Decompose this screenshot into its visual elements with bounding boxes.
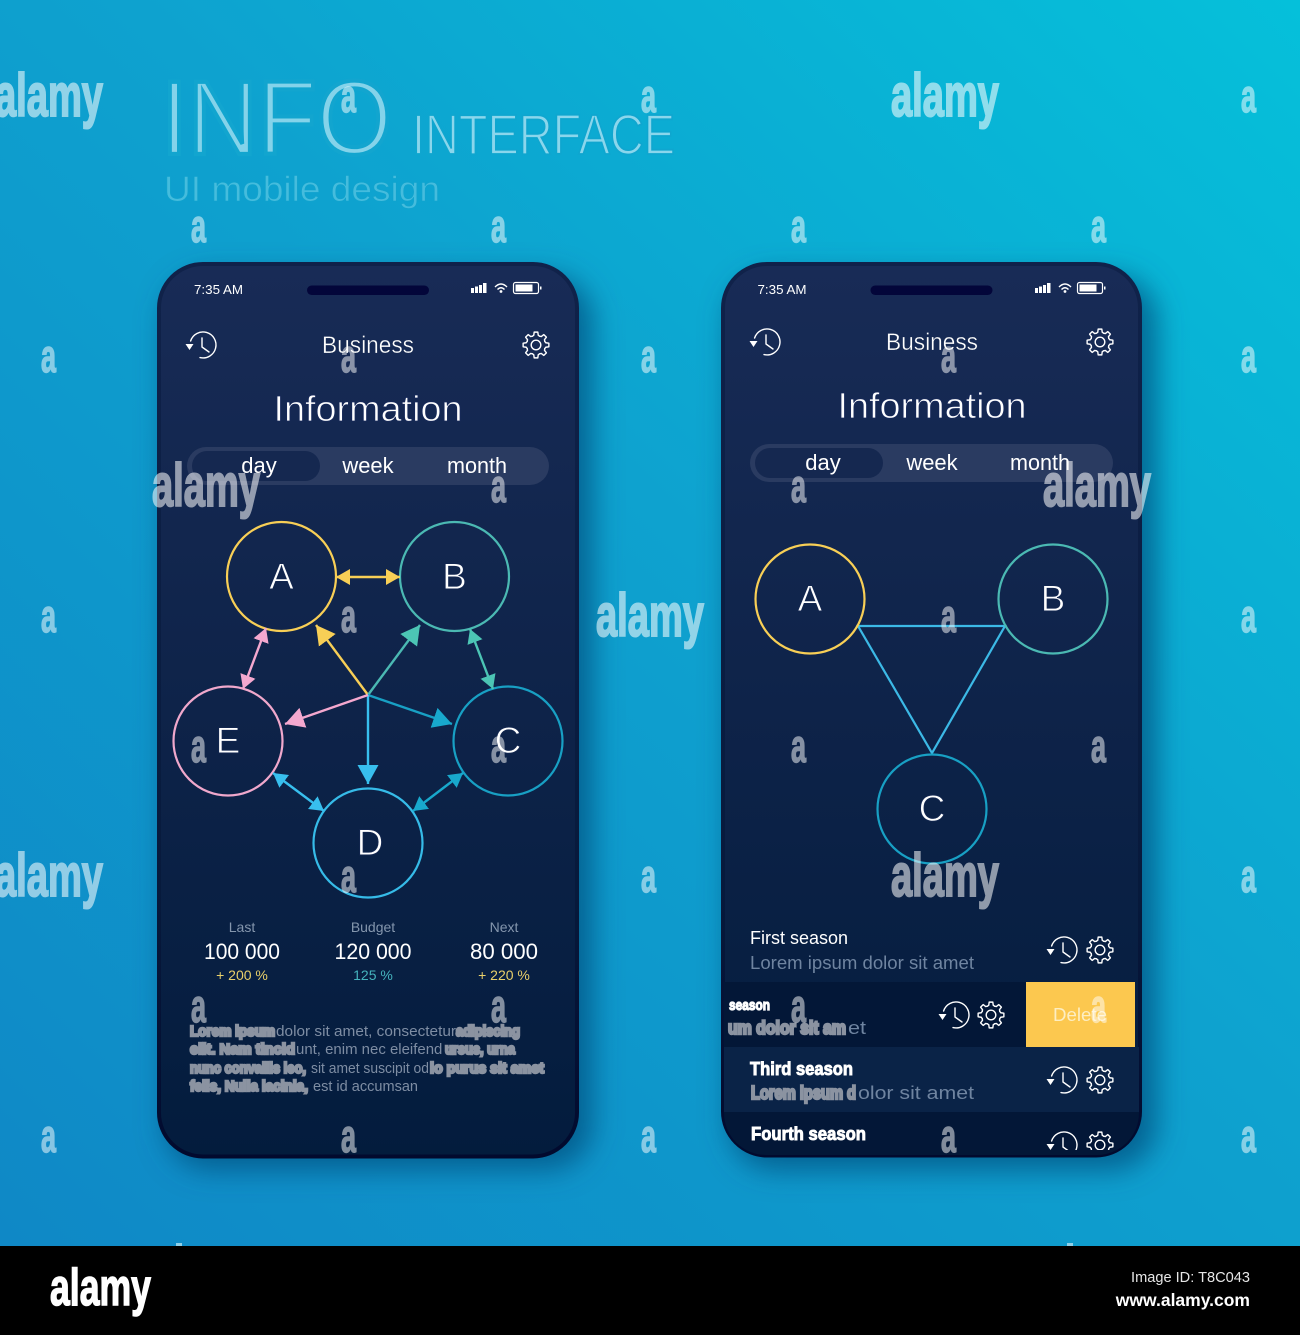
paragraph: felis, Nulla lacinia, [190, 1079, 308, 1095]
row: first season: Lorem ipsum dolor sit amet [750, 953, 974, 973]
tabs [750, 444, 1113, 482]
node A [756, 544, 864, 654]
row: third season background [724, 1047, 1139, 1112]
phone shadows [165, 275, 1157, 1170]
watermark: repeated letter a: a [1241, 590, 1256, 642]
node E [174, 686, 282, 796]
footer band: www.alamy.com [1115, 1290, 1250, 1310]
notch [870, 286, 992, 295]
tabs: month [1010, 450, 1070, 475]
stat: Next: 80 000 [470, 939, 538, 964]
status icons [1035, 282, 1106, 294]
stat: Budget: 120 000 [334, 939, 412, 964]
paragraph: adipiscing [456, 1024, 520, 1040]
node C: C [919, 788, 945, 829]
row: second season swiped: et [848, 1018, 866, 1038]
tabs: day [805, 450, 841, 475]
footer band: Image ID: T8C043 [1131, 1270, 1250, 1286]
watermark: repeated letter a: a [941, 330, 956, 382]
row: second season swiped [728, 1001, 1005, 1036]
paragraph: nunc convallis leo, [190, 1061, 306, 1077]
row: fourth season [752, 1126, 1114, 1150]
node A: A [269, 556, 294, 597]
watermark: alamy wordmarks: alamy [152, 452, 260, 519]
stat: Last: Last [229, 919, 255, 935]
node B: B [1041, 578, 1065, 619]
watermark: repeated letter a: a [491, 980, 506, 1032]
phone body [723, 264, 1140, 1156]
footer band [0, 1243, 1300, 1335]
phone: right [723, 264, 1140, 1158]
watermark: alamy wordmarks: alamy [0, 842, 103, 909]
watermark: repeated letter a: a [1241, 850, 1256, 902]
paragraph: unt, enim nec eleifend c [296, 1042, 454, 1058]
watermark: repeated letter a: a [41, 1110, 56, 1162]
watermark: repeated letter a: a [191, 200, 206, 252]
node B: B [442, 556, 467, 597]
icon: history [186, 332, 216, 358]
watermark: repeated letter a: a [1091, 200, 1106, 252]
watermark: alamy wordmarks: alamy [596, 582, 704, 649]
node C: C [495, 720, 521, 761]
stat: Next [470, 919, 538, 983]
triangle [858, 626, 1005, 753]
node D: D [357, 822, 383, 863]
title: INTERFACE: INTERFACE [412, 103, 675, 167]
watermark: repeated letter a: a [641, 850, 656, 902]
stat: Budget: Budget [351, 919, 395, 935]
paragraph: dolor sit amet, consectetur [276, 1024, 456, 1040]
watermark: repeated letter a: a [191, 980, 206, 1032]
watermark: repeated letter a: a [341, 590, 356, 642]
status icons [471, 282, 542, 294]
watermark: repeated letter a: a [1241, 1110, 1256, 1162]
status time: 7:35 AM [194, 282, 243, 297]
watermark: repeated letter a: a [341, 70, 356, 122]
watermark: repeated letter a: a [941, 590, 956, 642]
row: fourth season background [724, 1112, 1139, 1157]
watermark: repeated letter a: a [341, 850, 356, 902]
heading: Information: Information [274, 388, 462, 429]
diagram: triangle of three nodes [756, 544, 1108, 864]
heading: Information: Information [838, 385, 1026, 426]
footer band: alamy [50, 1259, 151, 1317]
row: first season [750, 928, 1113, 973]
paragraph: Lorem ipsum [190, 1024, 275, 1040]
row: third season: Lorem ipsum d [751, 1083, 856, 1103]
watermark: repeated letter a: a [641, 330, 656, 382]
stat: Budget [334, 919, 412, 983]
icon: settings [1087, 329, 1113, 355]
row: first season: First season [750, 928, 848, 948]
heading: Business: Business [322, 332, 414, 359]
watermark: alamy wordmarks [0, 62, 1151, 909]
watermark: repeated letter a: a [491, 460, 506, 512]
diagram: five node network [174, 522, 562, 898]
node C [878, 754, 986, 864]
status time: 7:35 AM [758, 282, 806, 297]
node A [227, 522, 336, 631]
row: third season: Third season [750, 1059, 853, 1079]
paragraph: elit. Nam tincid [190, 1042, 295, 1058]
node D [314, 788, 422, 898]
watermark: repeated letter a: a [941, 1110, 956, 1162]
phone body [159, 264, 577, 1156]
node A: A [798, 578, 823, 619]
row: fourth season: Fourth season [751, 1124, 866, 1144]
stat: Budget: 125 % [353, 967, 393, 983]
paragraph: est id accumsan [313, 1079, 418, 1095]
watermark: repeated letter a: a [1091, 980, 1106, 1032]
watermark: alamy wordmarks: alamy [891, 842, 999, 909]
heading: Business: Business [886, 329, 978, 356]
watermark: repeated letter a: a [791, 720, 806, 772]
row: second season swiped: um dolor sit am [728, 1018, 846, 1038]
watermark: repeated letter a: a [1241, 330, 1256, 382]
watermark: repeated letter a: a [491, 720, 506, 772]
watermark: alamy wordmarks: alamy [1043, 452, 1151, 519]
watermark: repeated letter a: a [641, 1110, 656, 1162]
row: second season swiped: season [729, 997, 770, 1014]
phone: left [159, 264, 577, 1156]
notch [307, 286, 429, 295]
node B [998, 544, 1108, 654]
node E: E [216, 720, 240, 761]
watermark: repeated letter a: a [41, 590, 56, 642]
watermark: repeated letter a [41, 70, 1256, 1162]
stat: Last: 100 000 [204, 939, 280, 964]
stat: Last [204, 919, 280, 983]
stat: Next: + 220 % [478, 967, 530, 983]
watermark: repeated letter a: a [1241, 70, 1256, 122]
watermark: repeated letter a: a [341, 330, 356, 382]
watermark: alamy wordmarks: alamy [0, 62, 103, 129]
paragraph: ursus, urna [445, 1042, 516, 1058]
row: third season [750, 1059, 1113, 1103]
watermark: repeated letter a: a [191, 720, 206, 772]
watermark: repeated letter a: a [41, 330, 56, 382]
icon: settings [523, 332, 549, 358]
stat: Next: Next [490, 919, 518, 935]
watermark: repeated letter a: a [791, 200, 806, 252]
watermark: repeated letter a: a [641, 70, 656, 122]
tabs [187, 447, 549, 485]
title: INFO: INFO [161, 60, 392, 177]
tabs: week [341, 453, 395, 478]
season list [724, 928, 1139, 1158]
stat: Last: + 200 % [216, 967, 268, 983]
watermark: repeated letter a: a [1091, 720, 1106, 772]
tabs: month [447, 453, 507, 478]
watermark: repeated letter a: a [491, 200, 506, 252]
watermark: repeated letter a: a [791, 460, 806, 512]
arrows from centre [285, 625, 452, 784]
row: third season: olor sit amet [858, 1083, 974, 1103]
node B [400, 522, 509, 631]
paragraph [190, 1024, 544, 1095]
delete button: Delete [1053, 1005, 1107, 1025]
row: second season background [724, 982, 1026, 1047]
tabs: day [241, 453, 277, 478]
double arrows between nodes [243, 577, 493, 811]
paragraph: io purus sit amet [430, 1061, 544, 1077]
node C [454, 686, 562, 796]
watermark: alamy wordmarks: alamy [891, 62, 999, 129]
watermark: repeated letter a: a [791, 980, 806, 1032]
subtitle: UI mobile design [164, 170, 440, 209]
paragraph: sit amet suscipit od [311, 1061, 429, 1077]
tabs: week [905, 450, 959, 475]
title block [161, 60, 675, 209]
delete button [1026, 982, 1135, 1047]
watermark: repeated letter a: a [341, 1110, 356, 1162]
icon: history [750, 329, 780, 355]
